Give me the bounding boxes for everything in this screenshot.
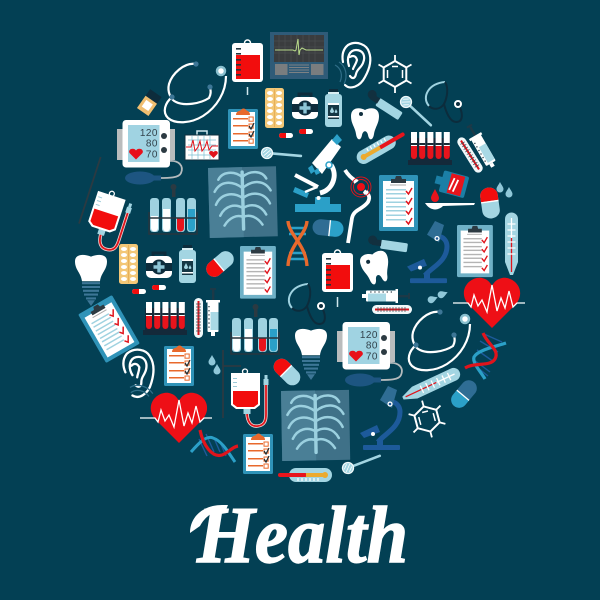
icon: thermometer horizontal bottom <box>278 468 332 482</box>
icon: dental mirror bottom <box>341 451 382 475</box>
icon: molecule top <box>378 55 412 93</box>
icon: blood pressure monitor 1: 70 <box>146 150 158 160</box>
icon: x-ray 1 <box>208 166 278 238</box>
icon: first aid kit top <box>292 94 318 119</box>
icon: capsule red right <box>479 186 501 220</box>
icon: capsule red centre <box>270 355 304 389</box>
icon: thermometer vertical <box>505 212 518 275</box>
icon: first aid kit left <box>146 253 172 278</box>
icon: test tube rack 1 <box>149 184 197 234</box>
icon: dental mirror left <box>261 147 301 161</box>
icon: drops left <box>208 355 220 374</box>
icon: clipboard blue-lined <box>379 175 418 231</box>
icon: dental mirror top <box>398 94 435 129</box>
icon: DNA right <box>465 333 506 379</box>
icon: vial rack top <box>408 132 452 165</box>
icon: small pill 2 <box>299 129 313 134</box>
icon: blood pressure monitor 2: 120 <box>360 330 378 341</box>
icon: medicine bottle and spoon <box>425 169 475 209</box>
icon: syringe vertical <box>206 288 220 336</box>
icon: dental probe top <box>364 88 404 120</box>
icon: syringe tilted <box>463 122 499 170</box>
icon: blood bag centre <box>322 250 353 307</box>
icon: blood pressure monitor 1 <box>117 120 182 184</box>
icon: capsule red left <box>203 248 237 280</box>
icon: IV bag tilted <box>74 157 144 253</box>
icon: blood pressure monitor 2: 80 <box>366 340 378 352</box>
icon: small pill 3 <box>132 289 146 294</box>
icon: blood pressure monitor 2 <box>337 322 402 386</box>
icon: blister pack left <box>119 244 138 284</box>
icon: blister pack top <box>265 88 284 128</box>
icon: thermometer vertical left <box>194 298 203 338</box>
icon: microscope white <box>293 134 342 212</box>
icon: stethoscope white <box>165 61 226 122</box>
icon: blood pressure monitor 1: 80 <box>146 138 158 150</box>
icon: DNA orange <box>288 221 307 266</box>
icon: clipboard orange 3 <box>243 434 273 474</box>
icon: heart with ECG right <box>453 278 525 328</box>
icon: stethoscope white right <box>409 309 470 370</box>
icon: dental probe centre <box>367 235 408 252</box>
icon: stethoscope dark top <box>426 82 462 122</box>
icon: ear left <box>120 347 161 406</box>
icon: thermometer tilted <box>354 127 408 167</box>
icon: blood pressure monitor 2: 70 <box>366 352 378 362</box>
icon: thermometer blue tilted <box>400 366 462 404</box>
icon: clipboard gray right <box>457 225 493 277</box>
icon: tooth centre <box>358 249 394 286</box>
icon: knee joint <box>345 170 371 243</box>
icon: tooth top <box>351 108 379 139</box>
icon: ECG case <box>185 131 219 160</box>
icon: capsule blue centre <box>312 218 344 238</box>
icon: clipboard tilted <box>78 295 140 363</box>
title: Health <box>196 492 408 580</box>
icon: x-ray 2 <box>281 390 350 461</box>
icon: capsule blue right <box>448 377 480 411</box>
icon: heart monitor <box>270 32 328 79</box>
icon: implant left <box>75 255 107 306</box>
icon: test tube rack 2 <box>231 304 279 354</box>
icon: stethoscope dark centre <box>289 284 325 324</box>
icon: drops right <box>496 182 512 198</box>
icon: small pill 4 <box>152 285 166 290</box>
icon: ear top <box>335 43 370 87</box>
icon: thermometer red tilted <box>456 136 484 174</box>
icon: thermometer horizontal <box>372 305 412 314</box>
icon: implant centre <box>295 329 327 380</box>
icon: microscope blue right <box>407 221 447 283</box>
icon: IV bag with stand <box>223 350 268 426</box>
icon: vial rack left <box>143 302 187 335</box>
icon: syringe horizontal <box>362 289 410 303</box>
icon: DNA left <box>191 430 238 462</box>
icon: clipboard gray left <box>240 246 276 299</box>
icon: medicine vial <box>137 89 162 116</box>
icon: clipboard orange 2 <box>164 346 194 386</box>
icon: bottle left <box>179 245 196 283</box>
icon: molecule lower <box>406 396 448 442</box>
icon: blood bag top <box>232 40 263 95</box>
icon: clipboard orange 1 <box>228 108 258 149</box>
icon: small pill 1 <box>279 133 293 138</box>
icon: heart with ECG left <box>140 393 212 443</box>
icon: microscope blue lower <box>360 386 400 450</box>
icon: blood pressure monitor 1: 120 <box>140 128 158 139</box>
icon: bottle top <box>325 89 342 127</box>
icon: drops centre <box>427 289 449 304</box>
